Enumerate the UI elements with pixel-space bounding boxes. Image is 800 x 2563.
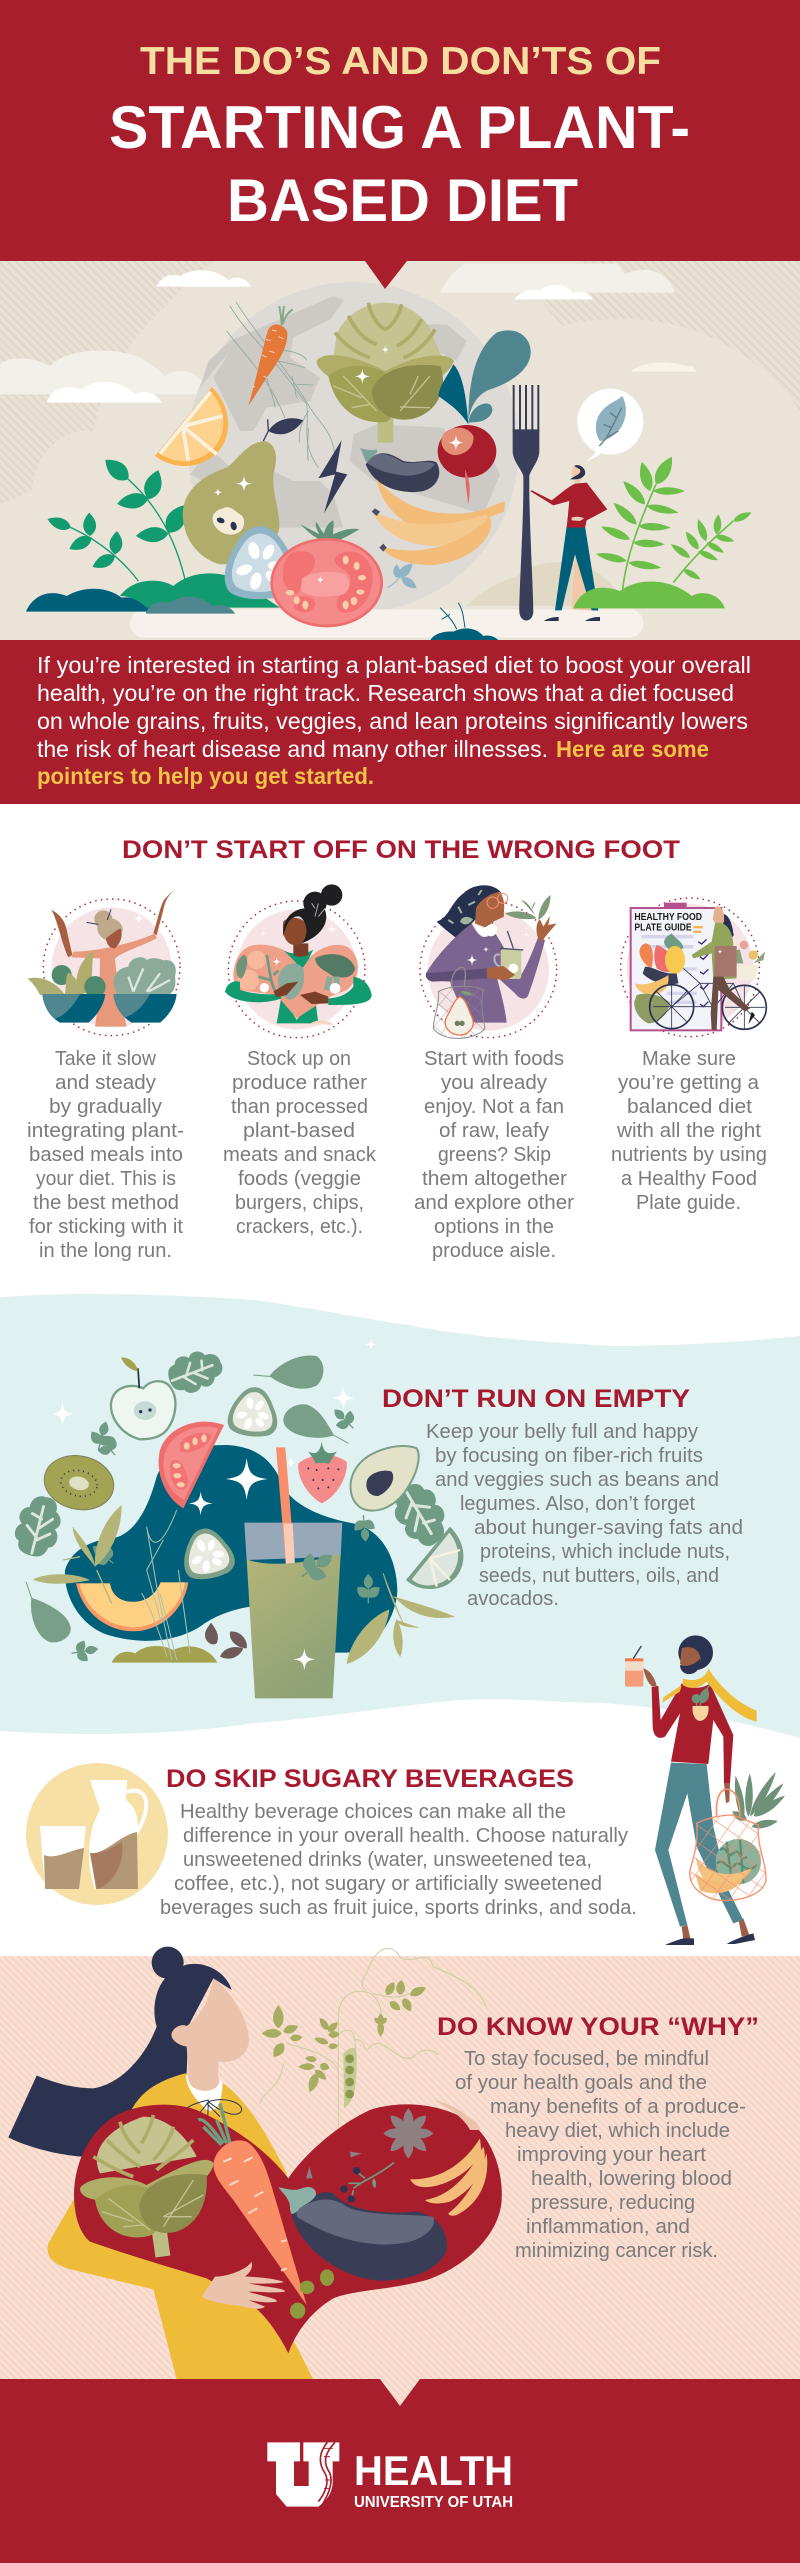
text: column 2: produce rather (232, 1072, 367, 1094)
text: know your why: health, lowering blood (531, 2168, 732, 2190)
bow (181, 2100, 242, 2153)
title: main line 2: BASED DIET (227, 167, 578, 234)
text: column 1: the best method (33, 1192, 179, 1214)
woman with heart (8, 1947, 502, 2379)
text: run on empty: by focusing on fiber-rich fruits (435, 1445, 703, 1467)
coat (48, 2073, 313, 2379)
logo mark: block U (267, 2442, 339, 2507)
hair (8, 1947, 232, 2157)
text: column 3: of raw, leafy (439, 1120, 549, 1142)
panel: footer (0, 2379, 800, 2563)
text: column 1: integrating plant- (27, 1120, 184, 1142)
heading: know your why: DO KNOW YOUR “WHY” (437, 2013, 759, 2041)
text: run on empty: about hunger-saving fats and (474, 1517, 743, 1539)
plant: light green (573, 454, 753, 608)
intro text: on whole grains, fruits, veggies, and lean proteins significantly lowers (37, 708, 748, 734)
panel: peach background (0, 1956, 800, 2416)
text: sugary beverages: coffee, etc.), not sugary or artificially sweetened (174, 1873, 602, 1895)
plate (188, 282, 519, 613)
icon: food plate guide (621, 898, 766, 1037)
bananas (410, 2138, 487, 2216)
text: know your why: improving your heart (517, 2144, 706, 2166)
text: column 2: crackers, etc.). (236, 1216, 363, 1238)
text: column 3: options in the (434, 1216, 554, 1238)
artichoke (80, 2115, 213, 2258)
carrot (198, 2103, 307, 2305)
speech bubble (577, 389, 643, 461)
intro highlight: pointers to help you get started. (37, 763, 374, 789)
logo text: HEALTH (354, 2447, 513, 2494)
pea plant (260, 1948, 487, 2127)
spinach leaves (26, 1356, 348, 1642)
text: column 1: your diet. This is (36, 1168, 176, 1190)
icon: woman with bowls (27, 890, 180, 1036)
icon: woman hugging produce (225, 884, 372, 1038)
plant: dark green sprigs (46, 454, 192, 581)
text: column 4: a Healthy Food (621, 1168, 757, 1190)
illustration: smoothie and produce (11, 1339, 463, 1698)
fork (513, 385, 539, 620)
sprigs (69, 1400, 383, 1666)
heart (74, 2104, 502, 2353)
text: column 1: Take it slow (55, 1048, 157, 1070)
text: sugary beverages: Healthy beverage choices can make all the (180, 1801, 566, 1823)
olives (290, 2269, 334, 2319)
text: column 4: with all the right (616, 1120, 761, 1142)
bananas (372, 479, 505, 565)
text: column 3: greens? Skip (438, 1144, 551, 1166)
text: know your why: pressure, reducing (531, 2192, 695, 2214)
bushes (26, 573, 499, 641)
text: run on empty: and veggies such as beans and (435, 1469, 719, 1491)
text: column 2: meats and snack (223, 1144, 377, 1166)
mound and dill (112, 1510, 217, 1663)
text: column 1: by gradually (49, 1096, 162, 1118)
text: column 3: enjoy. Not a fan (424, 1096, 564, 1118)
text: column 4: you’re getting a (618, 1072, 760, 1094)
carrot (248, 306, 293, 406)
man with net bag (625, 1635, 787, 1945)
kiwi (39, 1449, 119, 1516)
text: column 1: based meals into (29, 1144, 183, 1166)
seed and bolt (263, 418, 347, 513)
star anise (306, 2108, 433, 2178)
heading: sugary beverages: DO SKIP SUGARY BEVERAGES (166, 1765, 574, 1793)
hand (202, 2262, 285, 2309)
kale leaves (11, 1342, 458, 1560)
tomato slice (159, 1422, 224, 1508)
cucumbers (179, 1384, 282, 1582)
text: know your why: heavy diet, which include (505, 2120, 730, 2142)
text: column 3: Start with foods (424, 1048, 564, 1070)
tomato (272, 520, 382, 626)
text: column 3: them altogether (422, 1168, 567, 1190)
text: column 3: and explore other (414, 1192, 574, 1214)
intro highlight: Here are some (556, 736, 709, 762)
text: column 4: Plate guide. (636, 1192, 741, 1214)
fingers (433, 2100, 480, 2130)
text: run on empty: Keep your belly full and happy (426, 1421, 698, 1443)
cucumber slice (225, 526, 298, 599)
lime slice (406, 1527, 463, 1589)
text: column 2: foods (veggie (238, 1168, 361, 1190)
melon (76, 1582, 188, 1631)
text: column 4: Make sure (642, 1048, 736, 1070)
panel: intro (0, 640, 800, 804)
face (171, 1978, 249, 2091)
text: run on empty: proteins, which include nuts, (480, 1541, 730, 1563)
text: run on empty: legumes. Also, don’t forget (460, 1493, 695, 1515)
guide title text: PLATE GUIDE (634, 923, 692, 934)
heading: run on empty: DON’T RUN ON EMPTY (382, 1385, 690, 1413)
eggplant (278, 2187, 447, 2281)
text: know your why: To stay focused, be mindful (464, 2048, 709, 2070)
text: column 2: Stock up on (247, 1048, 351, 1070)
text: column 1: and steady (55, 1072, 156, 1094)
sprig: blue (387, 560, 419, 592)
text: know your why: minimizing cancer risk. (515, 2240, 718, 2262)
intro text: health, you’re on the right track. Research shows that a diet focused (37, 680, 734, 706)
dill (227, 302, 335, 468)
man with fork (530, 465, 607, 621)
panel: hero illustration (0, 261, 800, 641)
text: run on empty: seeds, nut butters, oils, and (479, 1565, 719, 1587)
sparkles (51, 1339, 377, 1515)
radish (438, 330, 531, 504)
strawberry (298, 1442, 347, 1503)
panel: header (0, 0, 800, 289)
text: column 2: burgers, chips, (235, 1192, 364, 1214)
logo subtitle: UNIVERSITY OF UTAH (354, 2494, 513, 2511)
floor (130, 609, 643, 638)
text: column 1: for sticking with it (29, 1216, 183, 1238)
eggplant (360, 448, 439, 492)
text: sugary beverages: beverages such as fruit juice, sports drinks, and soda. (160, 1897, 637, 1919)
guide title text: HEALTHY FOOD (634, 912, 702, 923)
artichoke (317, 303, 454, 443)
pear (183, 441, 279, 564)
icon: woman with juice (420, 885, 557, 1038)
text: run on empty: avocados. (467, 1588, 559, 1610)
text: column 1: in the long run. (39, 1240, 172, 1262)
clouds (0, 264, 697, 403)
text: column 2: plant-based (243, 1120, 355, 1142)
intro text: the risk of heart disease and many other illnesses. (37, 736, 548, 762)
avocado (351, 1446, 419, 1511)
text: column 4: nutrients by using (611, 1144, 767, 1166)
orange slice (155, 387, 228, 466)
glass (244, 1447, 343, 1698)
text: know your why: of your health goals and the (455, 2072, 707, 2094)
olive leaves (33, 1505, 453, 1664)
text: sugary beverages: difference in your overall health. Choose naturally (183, 1825, 628, 1847)
blob (65, 1445, 397, 1653)
text: column 3: produce aisle. (432, 1240, 556, 1262)
text: know your why: many benefits of a produce- (490, 2096, 746, 2118)
title: eyebrow: THE DO’S AND DON’TS OF (140, 40, 661, 83)
text: know your why: inflammation, and (526, 2216, 690, 2238)
text: column 3: you already (441, 1072, 547, 1094)
text: column 4: balanced diet (627, 1096, 752, 1118)
text: sugary beverages: unsweetened drinks (water, unsweetened tea, (183, 1849, 592, 1871)
heading: wrong foot: DON’T START OFF ON THE WRONG FOOT (122, 836, 680, 864)
seeds (205, 1623, 247, 1659)
icon: beverages (26, 1763, 168, 1905)
berry sprig (340, 2162, 394, 2203)
title: main line 1: STARTING A PLANT- (109, 94, 690, 161)
apple (111, 1357, 175, 1439)
panel: teal background (0, 1294, 800, 1738)
intro text: If you’re interested in starting a plant-based diet to boost your overall (37, 652, 751, 678)
text: column 2: than processed (231, 1096, 368, 1118)
collar (186, 2075, 223, 2111)
